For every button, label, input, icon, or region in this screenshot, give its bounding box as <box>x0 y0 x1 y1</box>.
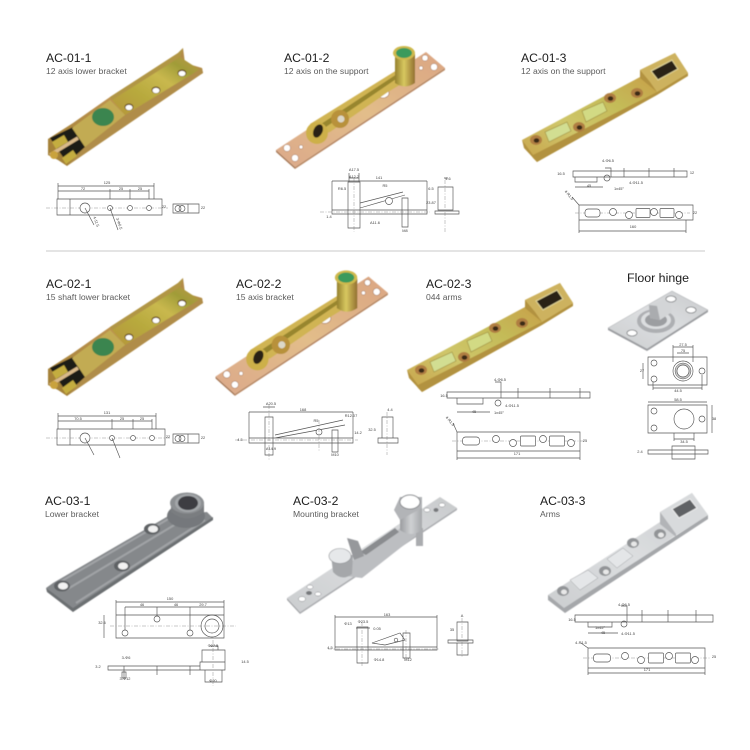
technical drawing: AC-03-2: M12 <box>404 657 412 662</box>
photo: floor hinge plate <box>608 291 708 351</box>
technical drawing: AC-01-2: 23.87 <box>426 200 436 205</box>
technical drawing: AC-03-3 <box>568 602 716 675</box>
technical drawing: AC-01-2: 6.5 <box>428 186 434 191</box>
product: AC-02-2 <box>216 270 398 460</box>
technical drawing: AC-01-3: 12 <box>690 170 694 175</box>
technical drawing: AC-02-2: R12.07 <box>345 413 357 418</box>
technical drawing: AC-03-3: 4-Φ11.5 <box>621 631 635 636</box>
heading: AC-03-2: AC-03-2 <box>293 494 339 508</box>
technical drawing: floor hinge: 27 <box>640 368 644 373</box>
technical drawing: AC-03-3: 4-Φ6.5 <box>618 602 630 607</box>
photo: silver mounting bracket <box>287 495 457 614</box>
technical drawing: AC-01-2: R6.5 <box>338 186 346 191</box>
technical drawing: floor hinge: 58.5 <box>674 397 682 402</box>
heading: AC-01-3: AC-01-3 <box>521 51 567 65</box>
subtitle: 12 axis on the support: 12 axis on the support <box>521 66 606 76</box>
heading: AC-03-3: AC-03-3 <box>540 494 586 508</box>
technical drawing: AC-02-2: 32.5 <box>368 427 376 432</box>
technical drawing: AC-01-1: 72 <box>81 186 85 191</box>
technical drawing: floor hinge: 2.4 <box>637 449 644 454</box>
technical drawing: floor hinge: 27.5 <box>679 342 687 347</box>
technical drawing: AC-03-2: 163 <box>384 612 390 617</box>
subtitle: 12 axis lower bracket: 12 axis lower bracket <box>46 66 127 76</box>
product: AC-03-1 <box>45 492 249 686</box>
technical drawing: AC-02-2: 168 <box>300 407 306 412</box>
technical drawing: AC-02-2: 4.5 <box>237 437 243 442</box>
technical drawing: AC-02-2: A14.9 <box>266 446 276 451</box>
subtitle: 15 shaft lower bracket: 15 shaft lower bracket <box>46 292 131 302</box>
technical drawing: AC-02-2: 4.4 <box>387 407 394 412</box>
technical drawing: AC-02-2: M10 <box>331 452 340 457</box>
photo: grey lower bracket <box>46 492 213 612</box>
technical drawing: AC-01-1 <box>46 180 205 230</box>
technical drawing: AC-01-1: 4-11.5 <box>92 216 101 227</box>
technical drawing: AC-03-3: 171 <box>644 667 650 672</box>
technical drawing: AC-02-3: 4-R1.5 <box>444 415 456 427</box>
technical drawing: AC-03-1: 14.5 <box>241 659 249 664</box>
technical drawing: AC-02-1: 22 <box>201 435 205 440</box>
subtitle: 15 axis bracket: 15 axis bracket <box>236 292 294 302</box>
technical drawing: AC-02-3: 16.5 <box>440 393 448 398</box>
subtitle: 12 axis on the support: 12 axis on the support <box>284 66 369 76</box>
technical drawing: AC-03-2: 0.05 <box>373 626 381 631</box>
photo: gold support bracket <box>216 270 388 396</box>
technical drawing: AC-01-2: A11.6 <box>370 220 380 225</box>
technical drawing: AC-02-2: R5 <box>314 418 318 423</box>
product: AC-01-2 <box>276 46 459 233</box>
technical drawing: AC-02-3: 45 <box>472 409 476 414</box>
technical drawing: AC-01-1: 22 <box>162 204 166 209</box>
heading: Floor hinge: Floor hinge <box>627 271 689 285</box>
divider <box>46 250 705 252</box>
technical drawing: AC-02-3: 4-Φ6.5 <box>494 377 506 382</box>
technical drawing: AC-02-3 <box>440 377 590 460</box>
product: AC-03-2 <box>287 494 473 666</box>
technical drawing: AC-01-3: 1x45° <box>614 186 624 191</box>
technical drawing: AC-03-2: Φ23.5 <box>358 619 368 624</box>
technical drawing: AC-01-2: M8 <box>402 228 408 233</box>
technical drawing: AC-02-1: 25 <box>140 416 144 421</box>
technical drawing: AC-02-1: 70.5 <box>74 416 82 421</box>
technical drawing: AC-01-2: R5 <box>383 183 387 188</box>
technical drawing: AC-03-1: 3.2 <box>95 664 101 669</box>
product: AC-01-1 <box>46 48 205 230</box>
technical drawing: AC-02-3: 4-Φ11.5 <box>505 403 519 408</box>
technical drawing: AC-03-3: 1x45° <box>595 625 605 630</box>
technical drawing: AC-03-2 <box>327 612 473 666</box>
technical drawing: AC-03-2: Φ13 <box>344 621 352 626</box>
heading: AC-01-2: AC-01-2 <box>284 51 330 65</box>
technical drawing: AC-01-1: 3-Φ6.5 <box>115 217 124 230</box>
technical drawing: AC-02-1: 22 <box>166 434 170 439</box>
technical drawing: AC-01-2: 1.4 <box>326 214 333 219</box>
subtitle: Arms: Arms <box>540 509 560 519</box>
technical drawing: AC-03-1: Φ27.5 <box>208 643 218 648</box>
technical drawing: AC-03-3: 25 <box>712 654 716 659</box>
technical drawing: floor hinge: 44.5 <box>674 388 682 393</box>
technical drawing: floor hinge <box>637 342 716 459</box>
product: AC-02-1 <box>46 277 205 458</box>
photo: gold lower bracket <box>48 48 203 166</box>
technical drawing: AC-03-1: 29.7 <box>199 602 207 607</box>
technical drawing: AC-01-2 <box>320 167 459 233</box>
technical drawing: floor hinge: 75 <box>681 348 685 353</box>
technical drawing: AC-02-3: 171 <box>514 451 520 456</box>
product: Floor hinge <box>608 271 716 459</box>
technical drawing: AC-03-2: A <box>461 613 464 618</box>
technical drawing: AC-01-3: 160 <box>630 224 637 229</box>
photo: brass arm <box>407 283 573 392</box>
technical drawing: AC-01-3: 4-Φ6.5 <box>602 158 614 163</box>
technical drawing: AC-03-3: 16.5 <box>568 617 576 622</box>
technical drawing: AC-02-2 <box>235 401 398 460</box>
technical drawing: AC-02-2: A20.5 <box>266 401 276 406</box>
technical drawing: AC-03-1: 32.6 <box>98 620 106 625</box>
technical drawing: AC-01-3: 4-Φ11.5 <box>629 180 643 185</box>
product: AC-03-3 <box>540 493 716 675</box>
technical drawing: AC-03-1: 46 <box>140 602 144 607</box>
technical drawing: AC-03-1: 3-Φ6 <box>122 655 130 660</box>
technical drawing: AC-03-3: 45 <box>601 630 605 635</box>
heading: AC-02-2: AC-02-2 <box>236 277 282 291</box>
subtitle: 044 arms: 044 arms <box>426 292 462 302</box>
technical drawing: AC-01-2: A12.2 <box>349 174 359 179</box>
technical drawing: AC-03-1 <box>95 596 249 686</box>
technical drawing: AC-01-3: 4-R1.5 <box>563 189 575 201</box>
photo: gold support bracket <box>276 46 445 169</box>
technical drawing: AC-01-1: 25 <box>119 186 123 191</box>
technical drawing: AC-02-2: 14.2 <box>354 430 362 435</box>
subtitle: Lower bracket: Lower bracket <box>45 509 100 519</box>
technical drawing: AC-01-3 <box>557 158 697 233</box>
technical drawing: AC-01-2: A17.5 <box>349 167 359 172</box>
product: AC-01-3 <box>521 51 697 233</box>
technical drawing: floor hinge: 34.5 <box>680 439 688 444</box>
technical drawing: AC-01-1: 125 <box>104 180 110 185</box>
technical drawing: AC-01-2: 141 <box>376 175 382 180</box>
photo: gold lower bracket <box>48 278 203 396</box>
photo: brass arm <box>522 53 688 162</box>
technical drawing: AC-01-3: 16.5 <box>557 171 565 176</box>
technical drawing: AC-02-1 <box>46 410 205 458</box>
technical drawing: AC-03-2: Φ14.8 <box>374 657 384 662</box>
product: AC-02-3 <box>407 277 590 460</box>
technical drawing: AC-03-1: 46 <box>174 602 178 607</box>
technical drawing: AC-01-3: 45 <box>587 183 591 188</box>
technical drawing: AC-02-3: 1x45° <box>494 410 504 415</box>
technical drawing: AC-01-1: 25 <box>138 186 142 191</box>
technical drawing: AC-03-1: 150 <box>167 596 174 601</box>
technical drawing: AC-03-1: 3-Φ12 <box>120 676 130 681</box>
technical drawing: AC-03-1: Φ20 <box>209 678 218 683</box>
technical drawing: AC-01-3: 22 <box>693 210 697 215</box>
technical drawing: AC-03-2: 4.5 <box>327 645 333 650</box>
heading: AC-02-3: AC-02-3 <box>426 277 472 291</box>
photo: silver arm <box>548 493 708 613</box>
heading: AC-03-1: AC-03-1 <box>45 494 91 508</box>
technical drawing: AC-02-1: 131 <box>104 410 110 415</box>
technical drawing: AC-01-2: 4.6 <box>445 176 451 181</box>
technical drawing: AC-03-2: 35 <box>450 627 454 632</box>
technical drawing: AC-01-1: 22 <box>201 205 205 210</box>
technical drawing: AC-02-3: 25 <box>583 438 587 443</box>
heading: AC-01-1: AC-01-1 <box>46 51 92 65</box>
technical drawing: floor hinge: 38 <box>712 416 716 421</box>
subtitle: Mounting bracket: Mounting bracket <box>293 509 360 519</box>
technical drawing: AC-03-3: 4-R1.5 <box>575 640 587 645</box>
technical drawing: AC-02-1: 25 <box>120 416 124 421</box>
heading: AC-02-1: AC-02-1 <box>46 277 92 291</box>
